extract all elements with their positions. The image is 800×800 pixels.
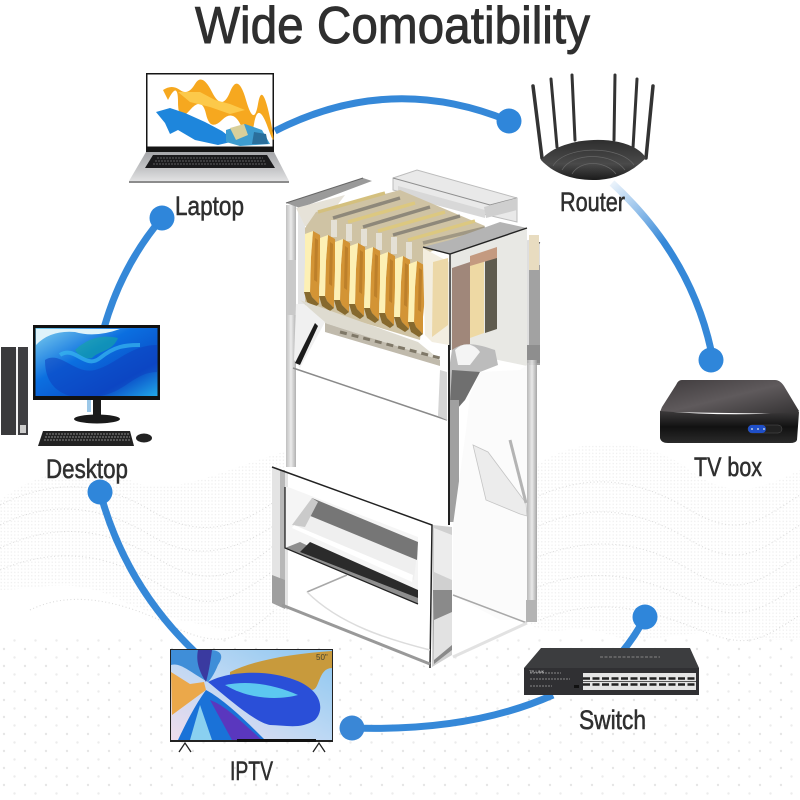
label: IPTV: IPTV: [230, 756, 273, 786]
icon: IPTV television: [170, 649, 333, 752]
plug: transparent body: [272, 170, 540, 668]
plug: rear latch: [393, 170, 517, 222]
icon: network switch: [524, 648, 699, 695]
background: dotted wave texture: [0, 444, 800, 800]
RJ45 connector plug: [272, 170, 540, 668]
icon: desktop computer: [1, 325, 160, 446]
label: Router: Router: [560, 187, 625, 217]
plug: front corner block and floor: [432, 525, 527, 667]
label: Desktop: Desktop: [46, 454, 128, 484]
icon: PC tower: [1, 347, 28, 435]
plug: front right wall with contacts: [423, 222, 540, 418]
arc: desktop to laptop: [104, 206, 174, 328]
plug: lower tab with window: [272, 467, 432, 668]
arc: TV box to switch: [622, 604, 658, 652]
icon: TV box: [660, 380, 799, 443]
arc: IPTV to desktop: [88, 480, 195, 652]
label: Switch: Switch: [579, 705, 646, 735]
label: Laptop: Laptop: [175, 191, 244, 221]
plug: middle cavity lines: [293, 300, 447, 420]
plug: right side lower wall: [448, 345, 537, 622]
icon: monitor: [33, 325, 160, 424]
icon: keyboard and mouse: [38, 431, 152, 446]
icon: IPTV television: 50": [316, 653, 328, 662]
plug: contact strip tops: [305, 190, 485, 340]
plug: left wall: [286, 178, 372, 467]
arc: router to TV box: [612, 183, 724, 372]
arc: laptop to router: [275, 99, 522, 134]
icon: network switch: TP-LINK: [529, 669, 545, 674]
icon: router: [533, 75, 653, 180]
plug: gold contact blades: [304, 231, 449, 345]
icon: laptop: [129, 73, 289, 183]
arc: switch to IPTV: [340, 695, 553, 740]
label: TV box: TV box: [694, 452, 762, 482]
